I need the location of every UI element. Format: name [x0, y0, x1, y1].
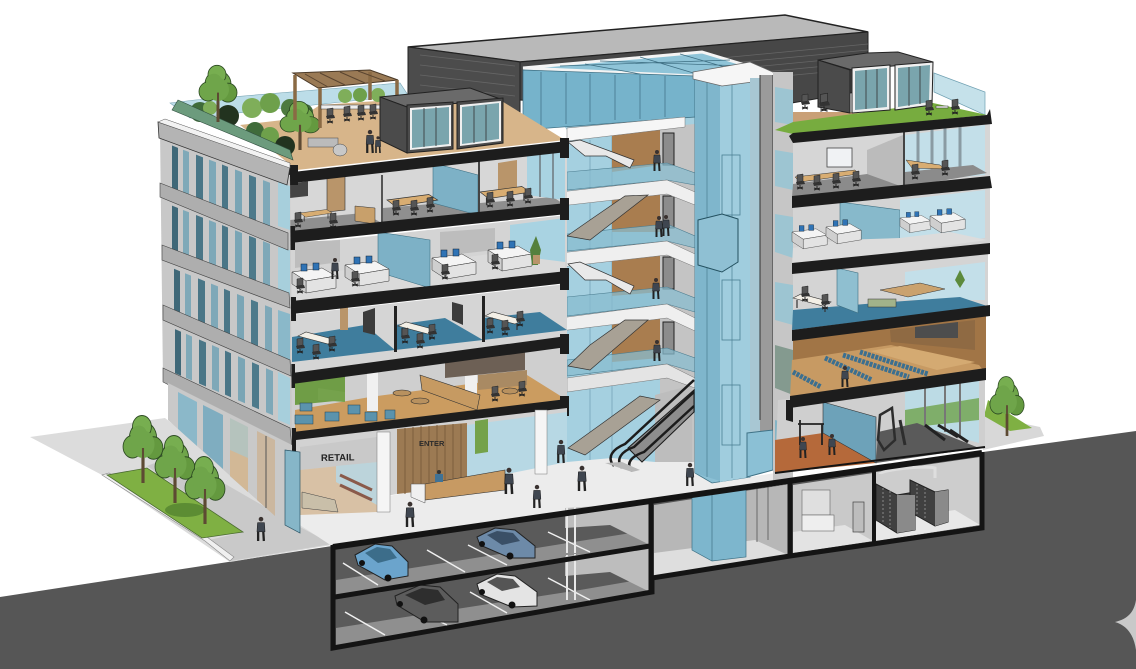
- retail sign: RETAIL: [321, 452, 355, 464]
- left roof terrace: back rail and greenery: [170, 83, 565, 170]
- white sedan: [477, 574, 537, 608]
- elevator roof cap: [693, 62, 775, 86]
- lobby sign: ENTER: [419, 439, 445, 448]
- mechanical penthouse block: [408, 15, 868, 140]
- blue car: [355, 544, 408, 582]
- elevator pit: [654, 484, 790, 580]
- pavement left plaza: [30, 418, 332, 562]
- lobby wood feature wall: [397, 423, 467, 494]
- ground floor facade: [168, 383, 292, 530]
- lobby floor: [300, 458, 790, 546]
- pergola: [293, 70, 398, 128]
- lobby glass background: [467, 412, 567, 482]
- rooftop bushes and planter: [172, 88, 385, 160]
- right roof: glass rail: [934, 73, 985, 115]
- people on atrium balconies: [652, 150, 670, 361]
- right floor 3: meeting and lounge: [792, 252, 988, 335]
- grey suv: [395, 585, 458, 624]
- lobby columns: [377, 410, 547, 512]
- lobby stairs down: [568, 396, 660, 455]
- atrium stairs: [567, 140, 648, 370]
- right roof pods: [818, 52, 933, 113]
- trees left: [123, 416, 225, 524]
- left floor 3: meeting rooms with blue floors: [290, 284, 567, 375]
- shadow on lawn: [165, 503, 205, 517]
- right floor 2: auditorium: [790, 315, 986, 398]
- right roof furniture: [801, 93, 960, 115]
- right floor 4: desks: [792, 182, 990, 270]
- lobby people: [257, 440, 694, 541]
- service core: [747, 75, 793, 477]
- below-ground section outlines: [333, 447, 985, 648]
- tree right: [990, 377, 1024, 436]
- escalators: [605, 380, 694, 472]
- left floor 5: offices: [290, 148, 567, 238]
- reception desk: [411, 470, 505, 503]
- blue-grey sedan: [477, 528, 535, 560]
- right wing: facade column and glass: [773, 72, 793, 482]
- right wing slabs: [786, 109, 992, 422]
- right sidewalk and lawn: [982, 400, 1044, 450]
- rooftop trees: [199, 65, 320, 150]
- left slabs: [285, 138, 569, 454]
- atrium side walls and doors: [655, 124, 695, 490]
- service room: plant: [793, 473, 873, 553]
- atrium glass and back wall: [523, 52, 768, 500]
- rooftop lounge and people: [308, 130, 381, 156]
- lawn left: [107, 468, 243, 538]
- retail shop: [285, 437, 377, 533]
- left floor 4: workstations: [290, 215, 567, 308]
- left floor 2: cafe lounge: [290, 345, 567, 437]
- watermark sparkle: [1115, 600, 1136, 650]
- green wall: [475, 419, 488, 454]
- ground: asphalt cut plane: [0, 431, 1136, 669]
- lobby back wall: [296, 408, 567, 513]
- elevator shaft: [695, 78, 750, 483]
- elevator cab: [698, 214, 738, 272]
- right roof: wood deck and green roof: [775, 103, 987, 134]
- right ground floor: gym: [775, 378, 985, 473]
- left facade: [158, 119, 292, 448]
- atrium white slabs and glass railings: [560, 117, 695, 392]
- service room: server racks: [876, 457, 980, 541]
- parking garage: [336, 503, 650, 648]
- left roof pods: [380, 88, 503, 153]
- atrium wood wall panels: [612, 130, 668, 362]
- right floor 5: open office: [792, 118, 990, 205]
